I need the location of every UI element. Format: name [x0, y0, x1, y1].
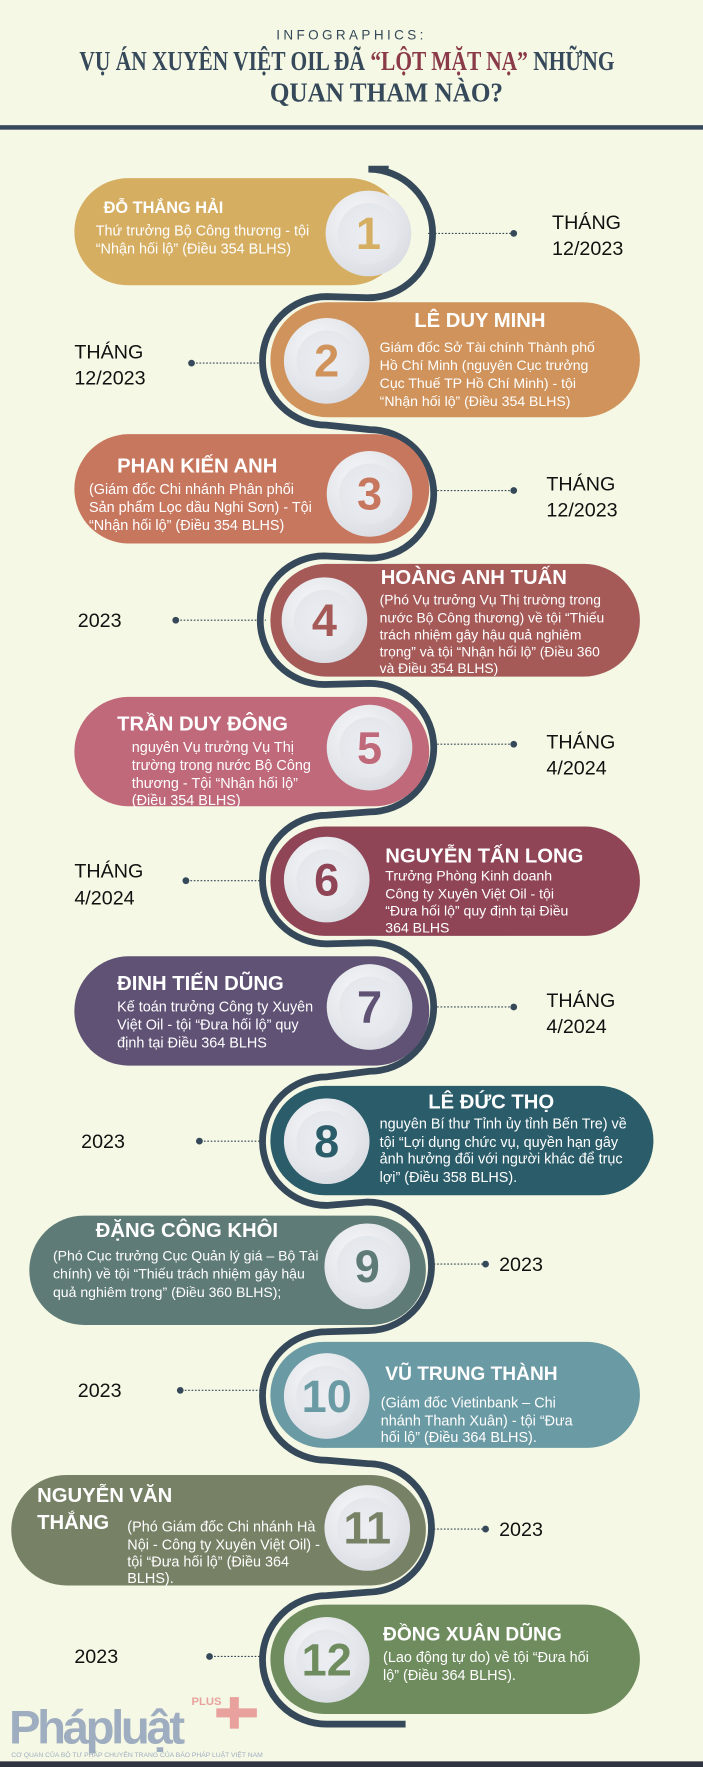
item 3: 12/2023	[546, 499, 618, 521]
item 12: 12	[302, 1635, 352, 1686]
item 10: 2023	[78, 1380, 122, 1402]
header: VỤ ÁN XUYÊN VIỆT OIL ĐÃ “LỘT MẶT NẠ” NHỮNG	[79, 45, 615, 76]
item 7: 4/2024	[546, 1016, 607, 1038]
item 6: THÁNG	[74, 859, 143, 882]
item 6: 4/2024	[74, 887, 135, 909]
item 11: 2023	[499, 1519, 543, 1541]
item 7: ĐINH TIẾN DŨNG	[117, 971, 284, 995]
item 4: nước Bộ Công thương) về tội “Thiếu	[380, 609, 604, 625]
item 10: hối lộ” (Điều 364 BLHS).	[381, 1430, 537, 1446]
logo: PLUS	[192, 1696, 222, 1708]
item 2: 12/2023	[74, 368, 146, 390]
logo	[9, 1696, 263, 1759]
item 1: 1	[356, 208, 381, 259]
item 10: 10	[302, 1371, 352, 1422]
item 5: nguyên Vụ trưởng Vụ Thị	[132, 740, 294, 756]
item 11: THẮNG	[37, 1510, 109, 1534]
item 4: trách nhiệm gây hậu quả nghiêm	[380, 626, 581, 642]
item 1: ĐỖ THẮNG HẢI	[104, 198, 223, 217]
item 6: Công ty Xuyên Việt Oil - tội	[385, 886, 554, 902]
serpentine line	[260, 169, 434, 1724]
item 9: (Phó Cục trưởng Cục Quản lý giá – Bộ Tài	[53, 1248, 319, 1264]
item 8: nguyên Bí thư Tỉnh ủy tỉnh Bến Tre) về	[380, 1117, 627, 1133]
item 7: Việt Oil - tội “Đưa hối lộ” quy	[117, 1018, 299, 1034]
item 8: 2023	[81, 1131, 125, 1153]
item 6: Trưởng Phòng Kinh doanh	[385, 868, 552, 884]
item 2: Cục Thuế TP Hồ Chí Minh) - tội	[380, 375, 576, 391]
item 4: 4	[312, 595, 337, 646]
item 3: THÁNG	[546, 473, 615, 496]
item 1: THÁNG	[552, 211, 621, 234]
item 6: 6	[314, 854, 339, 905]
item 3	[74, 434, 618, 544]
item 6: “Đưa hối lộ” quy định tại Điều	[385, 903, 568, 919]
item 8: tội “Lợi dụng chức vụ, quyền hạn gây	[380, 1135, 619, 1151]
item 12: lộ” (Điều 364 BLHS).	[383, 1668, 516, 1684]
item 2: LÊ DUY MINH	[414, 308, 546, 332]
item 11: BLHS).	[127, 1571, 174, 1587]
item 1: 12/2023	[552, 238, 623, 260]
item 8: LÊ ĐỨC THỌ	[428, 1089, 554, 1113]
item 9: 2023	[499, 1254, 543, 1276]
item 5: (Điều 354 BLHS)	[132, 793, 241, 809]
item 1: “Nhận hối lộ” (Điều 354 BLHS)	[96, 242, 291, 258]
item 5	[74, 697, 615, 809]
item 12: ĐỒNG XUÂN DŨNG	[383, 1624, 562, 1646]
item 3: Sản phẩm Lọc dầu Nghi Sơn) - Tội	[89, 500, 312, 516]
item 5: trường trong nước Bộ Công	[132, 758, 311, 774]
item 7: 7	[357, 982, 382, 1033]
item 4: 2023	[78, 610, 122, 632]
item 6	[74, 827, 640, 936]
item 2: THÁNG	[74, 341, 143, 364]
item 1: Thứ trưởng Bộ Công thương - tội	[96, 224, 309, 240]
item 11: Nội - Công ty Xuyên Việt Oil) -	[127, 1537, 320, 1553]
item 5: THÁNG	[546, 731, 615, 754]
item 6: NGUYỄN TẤN LONG	[385, 845, 583, 868]
item 11: (Phó Giám đốc Chi nhánh Hà	[127, 1519, 316, 1535]
item 2	[74, 302, 640, 417]
item 11: tội “Đưa hối lộ” (Điều 364	[127, 1554, 289, 1570]
item 8: 8	[314, 1116, 339, 1167]
item 9: ĐẶNG CÔNG KHÔI	[96, 1218, 278, 1242]
item 2: “Nhận hối lộ” (Điều 354 BLHS)	[380, 393, 571, 409]
item 3: 3	[357, 469, 382, 520]
logo: CƠ QUAN CỦA BỘ TƯ PHÁP CHUYÊN TRANG CỦA BÁO PHÁP LUẬT VIỆT NAM	[11, 1750, 263, 1759]
item 4: (Phó Vụ trưởng Vụ Thị trường trong	[380, 591, 601, 607]
item 5: 5	[357, 722, 382, 773]
item 4: và Điều 354 BLHS)	[380, 660, 498, 676]
item 9: quả nghiêm trọng” (Điều 360 BLHS);	[53, 1284, 281, 1300]
item 3: “Nhận hối lộ” (Điều 354 BLHS)	[89, 518, 284, 534]
item 9: 9	[355, 1241, 380, 1292]
item 1	[74, 178, 623, 285]
item 7: định tại Điều 364 BLHS	[117, 1036, 267, 1052]
header: QUAN THAM NÀO?	[270, 77, 503, 107]
item 5: TRẦN DUY ĐÔNG	[117, 712, 288, 736]
item 3: PHAN KIẾN ANH	[117, 454, 277, 477]
item 11: NGUYỄN VĂN	[37, 1484, 172, 1507]
item 7: THÁNG	[546, 989, 615, 1012]
item 10: nhánh Thanh Xuân) - tội “Đưa	[381, 1413, 574, 1429]
item 2: Hồ Chí Minh (nguyên Cục trưởng	[380, 357, 588, 373]
header: INFOGRAPHICS:	[276, 27, 427, 42]
logo: Phápluật	[9, 1701, 185, 1754]
item 2: Giám đốc Sở Tài chính Thành phố	[380, 339, 595, 355]
item 12: 2023	[74, 1646, 118, 1668]
item 8: lợi” (Điều 358 BLHS).	[380, 1170, 517, 1186]
item 11: 11	[343, 1503, 391, 1554]
item 7	[74, 956, 615, 1066]
item 4: trọng” và tội “Nhận hối lộ” (Điều 360	[380, 643, 600, 659]
item 6: 364 BLHS	[385, 920, 449, 936]
item 5: 4/2024	[546, 758, 607, 780]
item 3: (Giám đốc Chi nhánh Phân phối	[89, 482, 294, 498]
item 12: (Lao động tự do) về tội “Đưa hối	[383, 1650, 589, 1666]
item 7: Kế toán trưởng Công ty Xuyên	[117, 999, 313, 1015]
item 11	[11, 1475, 543, 1587]
item 4	[78, 564, 640, 677]
item 10: VŨ TRUNG THÀNH	[385, 1363, 558, 1385]
item 8	[81, 1086, 653, 1195]
item 9	[29, 1216, 543, 1325]
item 9: chính) về tội “Thiếu trách nhiệm gây hậu	[53, 1266, 305, 1282]
item 4: HOÀNG ANH TUẤN	[381, 566, 567, 589]
header	[79, 27, 615, 107]
item 12	[74, 1605, 640, 1714]
item 10: (Giám đốc Vietinbank – Chi	[381, 1395, 556, 1411]
item 10	[78, 1342, 640, 1448]
item 8: ảnh hưởng đối với người khác để trục	[380, 1152, 623, 1168]
item 2: 2	[314, 336, 339, 387]
item 5: thương - Tội “Nhận hối lộ”	[132, 776, 298, 792]
